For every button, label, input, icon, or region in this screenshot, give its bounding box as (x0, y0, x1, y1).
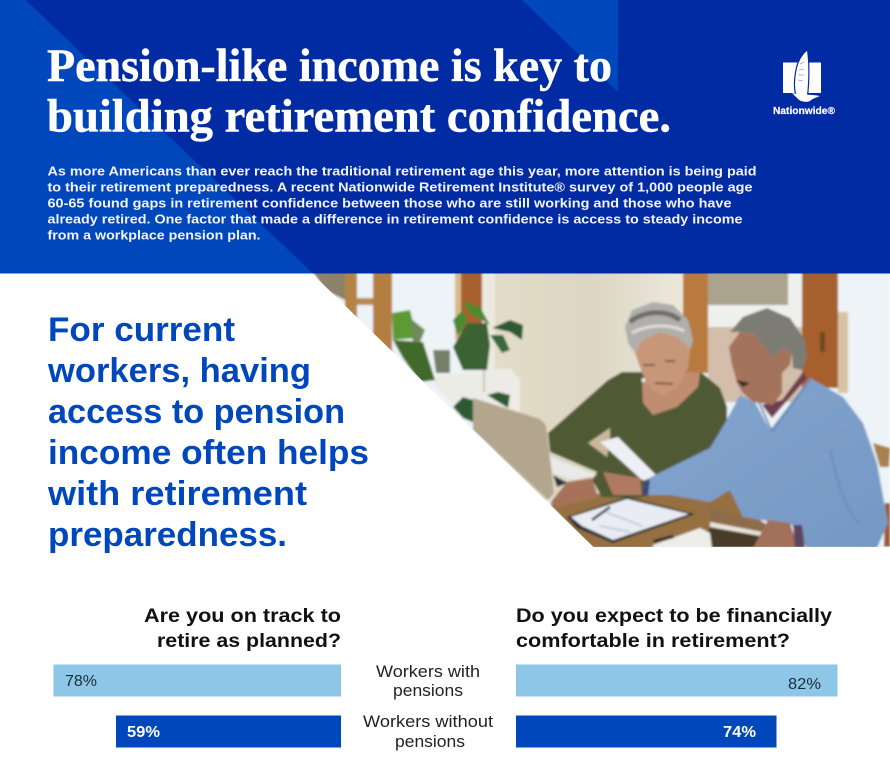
woman: hair (625, 302, 693, 353)
bar: workers without pensions 74%: 74% (723, 724, 756, 741)
heading: current workers: income often helps (48, 434, 369, 472)
heading: current workers: For current (48, 311, 236, 349)
question heading: on track to retire: retire as planned? (157, 631, 341, 652)
woman: sweater (548, 372, 727, 498)
panel: right question bar chart (516, 606, 838, 748)
plants (392, 302, 523, 423)
panel: header background (0, 0, 890, 274)
intro text block: already retired. One factor that made a difference in retirement confidence is access to steady income (48, 212, 742, 227)
heading: current workers: workers, having (47, 352, 311, 390)
question heading: on track to retire: Are you on track to (144, 606, 341, 627)
left window frames (312, 270, 345, 300)
chair (873, 443, 890, 467)
question heading: financially comfortable: comfortable in retirement? (516, 631, 790, 652)
question heading: financially comfortable (516, 606, 832, 652)
man: hair (730, 308, 807, 370)
panel: left question bar chart (54, 606, 341, 748)
legend labels: worker groups (363, 663, 493, 751)
bar: workers with pensions 82%: 82% (788, 676, 821, 693)
paper in hand (600, 437, 663, 482)
icon: Nationwide logo (773, 50, 835, 117)
question heading: on track to retire (144, 606, 341, 652)
table (550, 489, 767, 547)
intro text block (48, 164, 757, 242)
man: collar (762, 372, 807, 418)
bar: workers without pensions 74% (516, 716, 776, 748)
binder and pen (567, 497, 695, 543)
bar: workers with pensions 82% (516, 664, 838, 696)
legend labels: worker groups: pensions (395, 733, 465, 751)
question heading: financially comfortable: Do you expect to be financially (516, 606, 832, 627)
intro text block: As more Americans than ever reach the traditional retirement age this year, more attention is being paid (48, 164, 757, 179)
bar: workers with pensions 78%: 78% (65, 673, 97, 690)
intro text block: to their retirement preparedness. A recent Nationwide Retirement Institute® survey of 1,000 people age (48, 180, 752, 195)
logo wordmark: Nationwide® (773, 105, 835, 117)
heading: current workers (47, 311, 369, 554)
bar: workers with pensions 78% (54, 664, 341, 696)
bar: workers without pensions 59%: 59% (127, 724, 160, 741)
legend labels: worker groups: Workers without (363, 713, 493, 731)
bar: workers without pensions 59% (116, 716, 341, 748)
photo: couple reviewing finances at a table (300, 270, 890, 550)
hands (550, 478, 598, 507)
background wall and windows (300, 270, 890, 550)
right window frames and views (683, 270, 708, 373)
title: building retirement confidence. (47, 90, 671, 142)
woman: neck (642, 372, 700, 415)
intro text block: 60-65 found gaps in retirement confidence between those who are still working and those who have (48, 196, 732, 211)
heading: current workers: access to pension (48, 393, 345, 431)
desk papers (653, 528, 712, 548)
legend labels: worker groups: pensions (393, 682, 463, 700)
heading: current workers: with retirement (47, 475, 308, 513)
laptop deck and keyboard (550, 457, 597, 480)
legend labels: worker groups: Workers with (376, 663, 480, 681)
heading: current workers: preparedness. (48, 516, 287, 554)
man: sweater (642, 378, 888, 548)
woman: face (635, 332, 690, 395)
man: face (729, 332, 792, 405)
title (47, 40, 671, 142)
title: Pension-like income is key to (47, 40, 612, 92)
book and man's hand (712, 509, 764, 530)
laptop lid (473, 398, 554, 500)
intro text block: from a workplace pension plan. (48, 227, 260, 242)
